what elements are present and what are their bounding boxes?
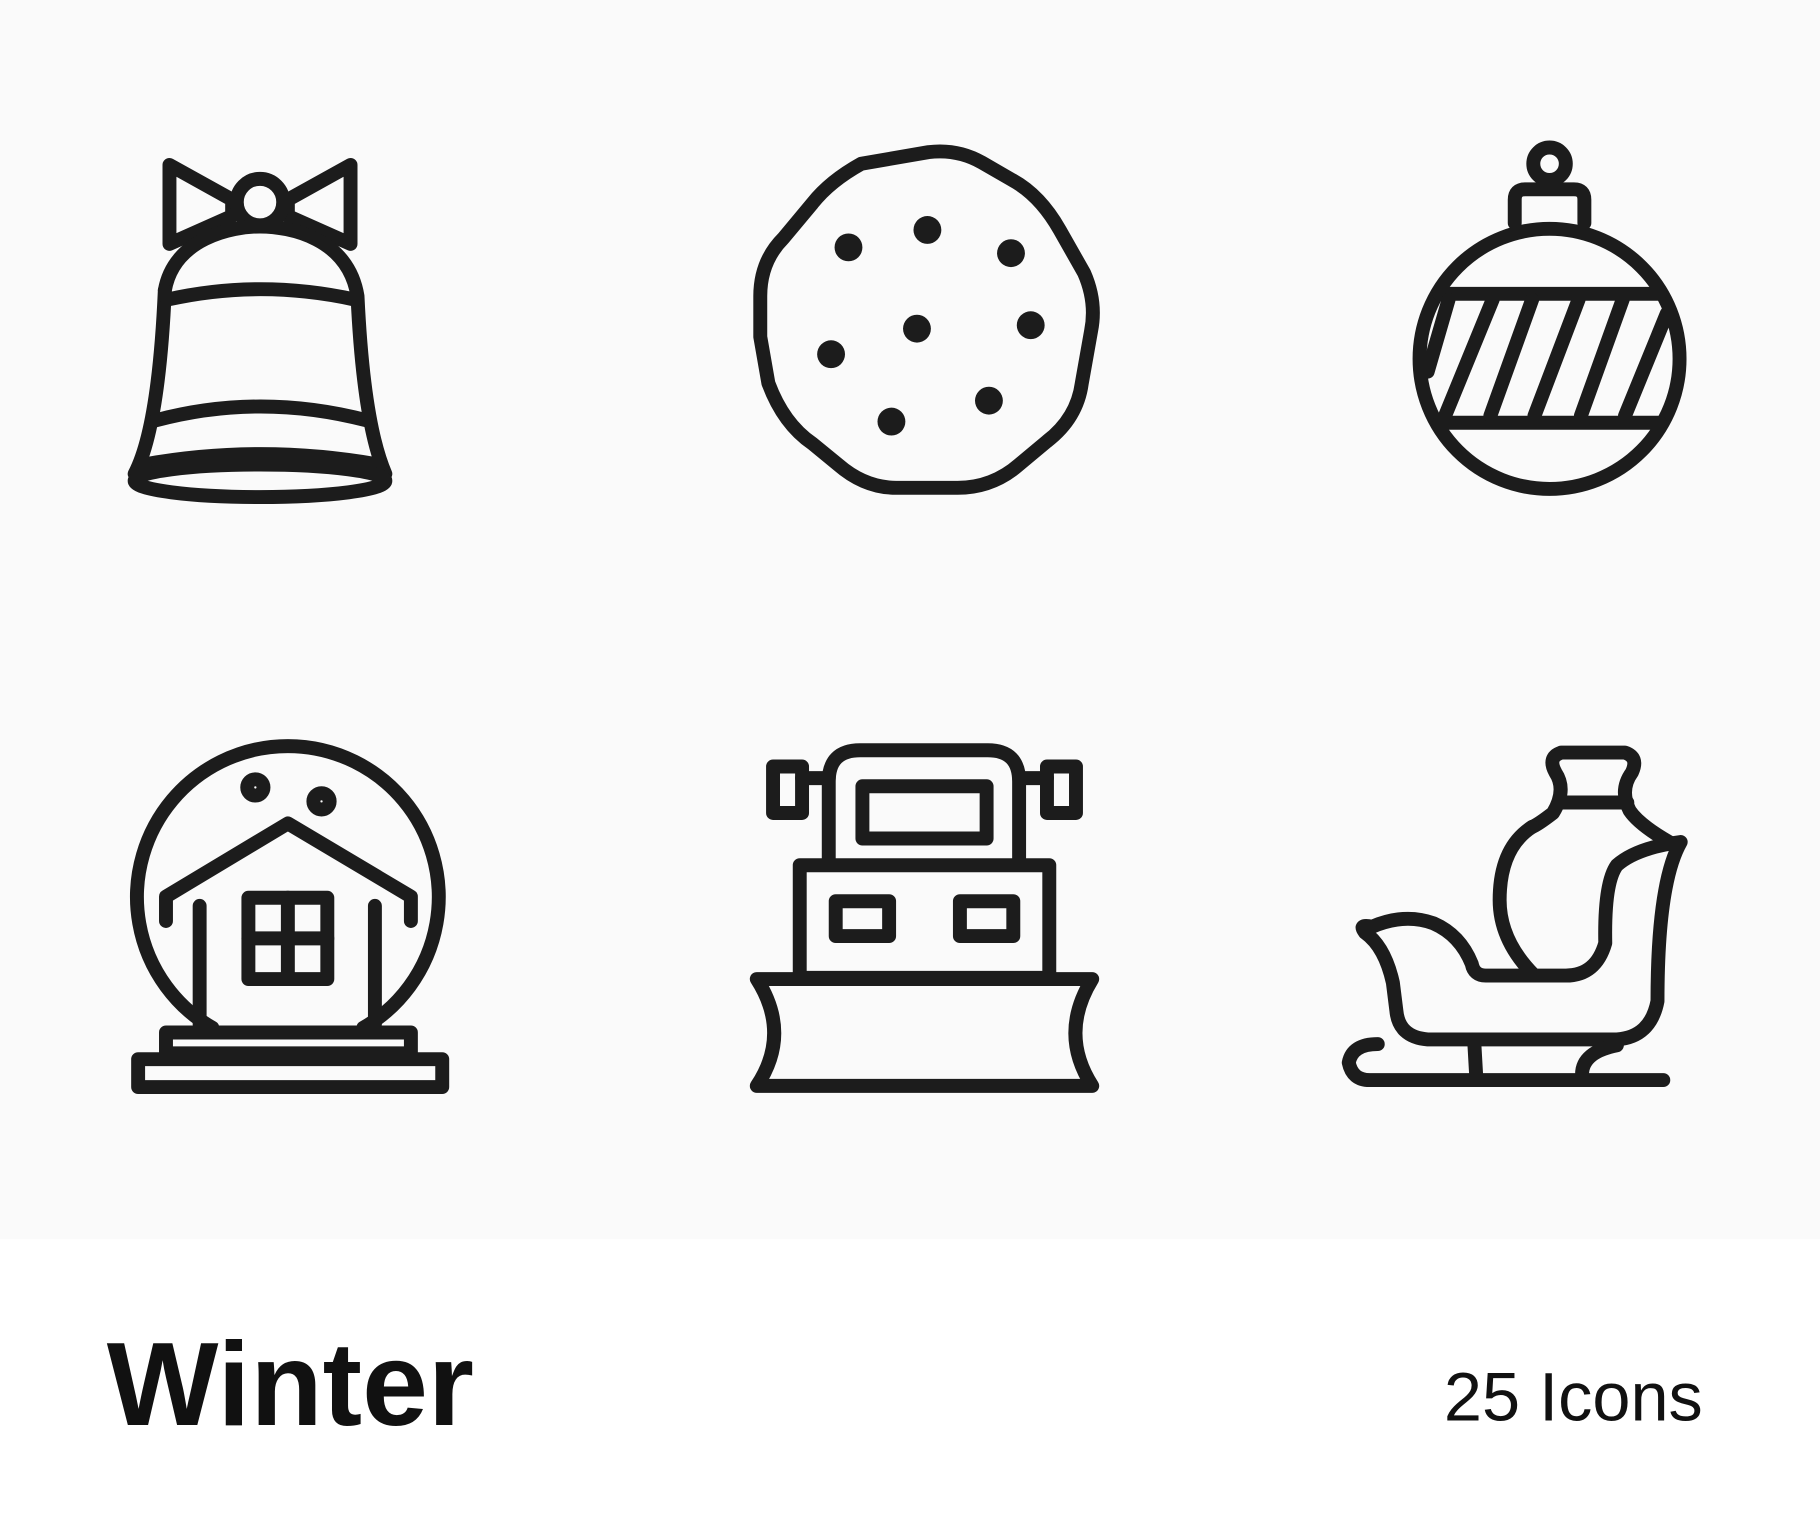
icon: cookie (760, 151, 1093, 488)
icon: bell (135, 165, 385, 497)
icon: ornament (1420, 147, 1680, 489)
icon: snow globe (137, 746, 442, 1087)
subtitle: count: 25 Icons (1444, 1358, 1703, 1435)
title: Winter (107, 1319, 474, 1451)
icon: snowplough (757, 750, 1092, 1086)
icon: sleigh (1349, 753, 1681, 1080)
